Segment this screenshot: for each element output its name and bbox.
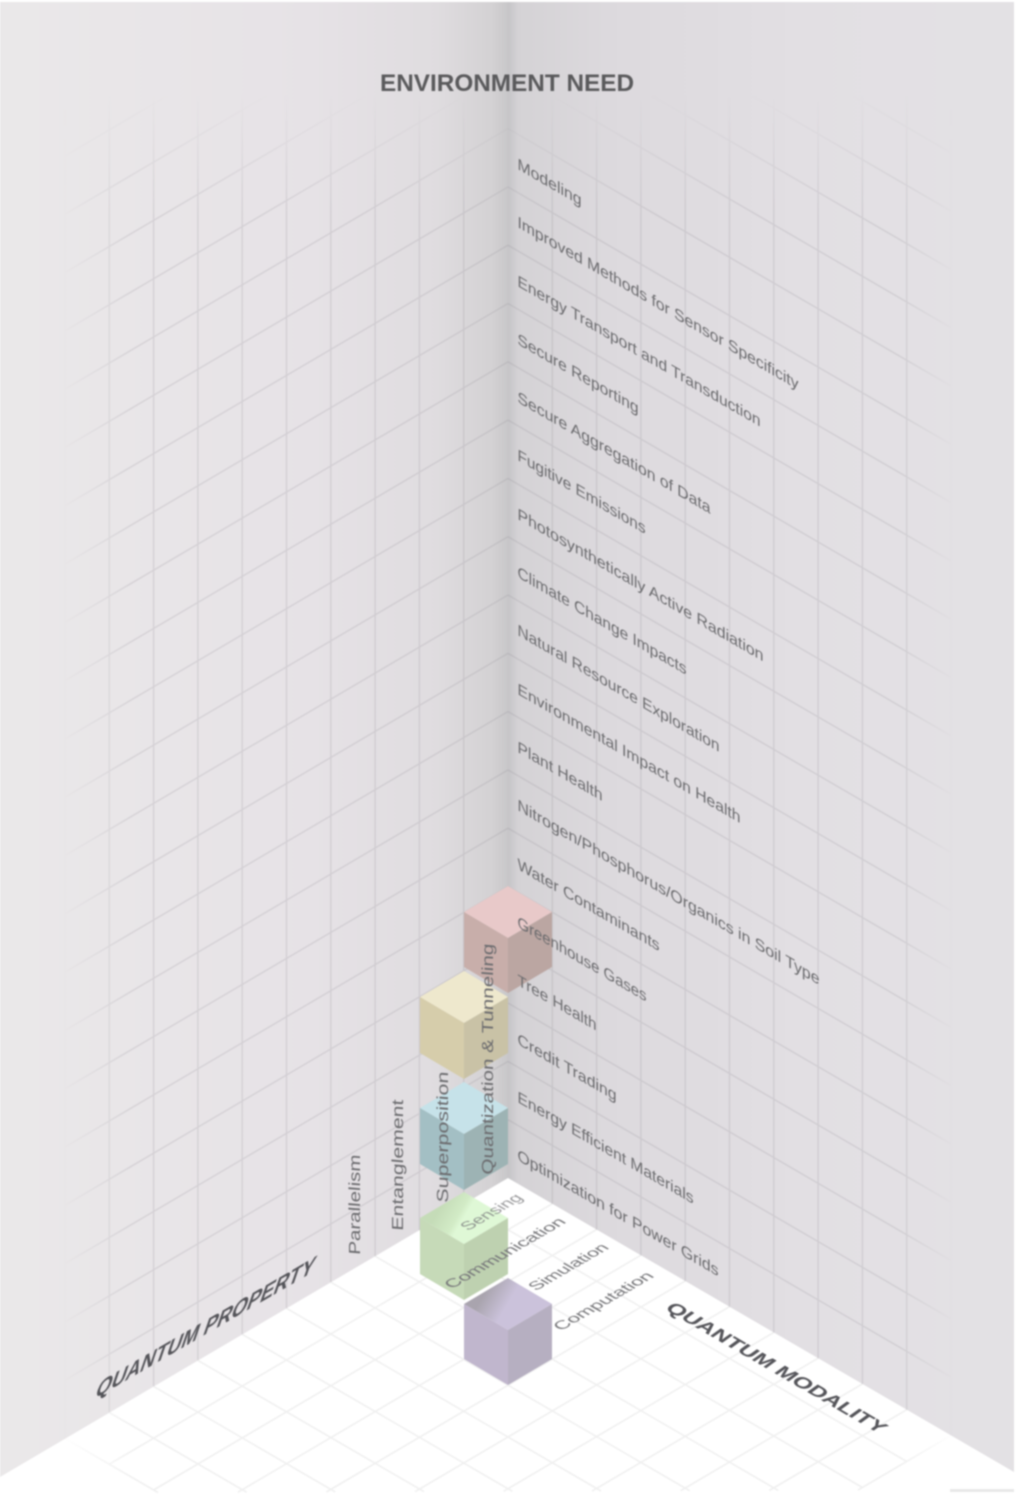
label: credit trading: Credit Trading	[518, 1029, 616, 1105]
cube: yellow	[420, 971, 508, 1079]
label: modeling: Modeling	[518, 154, 582, 210]
label: secure reporting: Secure Reporting	[518, 329, 638, 418]
title: environment need: ENVIRONMENT NEED	[380, 70, 634, 97]
axis title: quantum modality: QUANTUM MODALITY	[660, 1300, 892, 1437]
panel: left wall	[0, 2, 508, 1477]
axis labels: environment needs	[518, 154, 820, 1280]
label: photosynthetically active radiation: Photosynthetically Active Radiation	[518, 504, 764, 665]
label: nitrogen: Nitrogen/Phosphorus/Organics in Soil Type	[518, 795, 820, 989]
label: optimization: Optimization for Power Grids	[518, 1145, 719, 1280]
label: quantization and tunneling: Quantization & Tunneling	[479, 943, 497, 1175]
label: simulation: Simulation	[524, 1241, 613, 1293]
panel: right wall	[508, 2, 1014, 1472]
label: natural resource: Natural Resource Exploration	[518, 620, 720, 756]
label: tree health: Tree Health	[518, 970, 596, 1035]
label: entanglement: Entanglement	[389, 1098, 407, 1231]
axis title: quantum property: QUANTUM PROPERTY	[92, 1249, 320, 1405]
label: environmental impact: Environmental Impact on Health	[518, 679, 740, 827]
label: sensing: Sensing	[456, 1191, 527, 1233]
label: parallelism: Parallelism	[346, 1154, 364, 1255]
label: fugitive emissions: Fugitive Emissions	[518, 445, 646, 538]
label: climate change: Climate Change Impacts	[518, 562, 687, 679]
label: plant health: Plant Health	[518, 737, 602, 805]
cube: blue	[420, 1082, 508, 1190]
label: communication: Communication	[440, 1215, 570, 1291]
label: computation: Computation	[549, 1269, 658, 1333]
label: greenhouse gases: Greenhouse Gases	[518, 912, 647, 1006]
cube: purple	[464, 1278, 552, 1385]
axis labels: quantum modalities	[440, 1191, 658, 1333]
cube: pink	[464, 886, 552, 993]
axis labels: quantum properties	[346, 943, 497, 1255]
label: improved methods: Improved Methods for Sensor Specificity	[518, 212, 799, 394]
label: water contaminants: Water Contaminants	[518, 854, 660, 955]
label: energy transport: Energy Transport and Transduction	[518, 271, 760, 431]
label: secure aggregation: Secure Aggregation of Data	[518, 387, 711, 518]
cube: green	[420, 1192, 508, 1300]
panel: floor	[109, 1204, 1014, 1492]
label: energy efficient: Energy Efficient Materials	[518, 1087, 694, 1208]
label: superposition: Superposition	[434, 1071, 452, 1203]
